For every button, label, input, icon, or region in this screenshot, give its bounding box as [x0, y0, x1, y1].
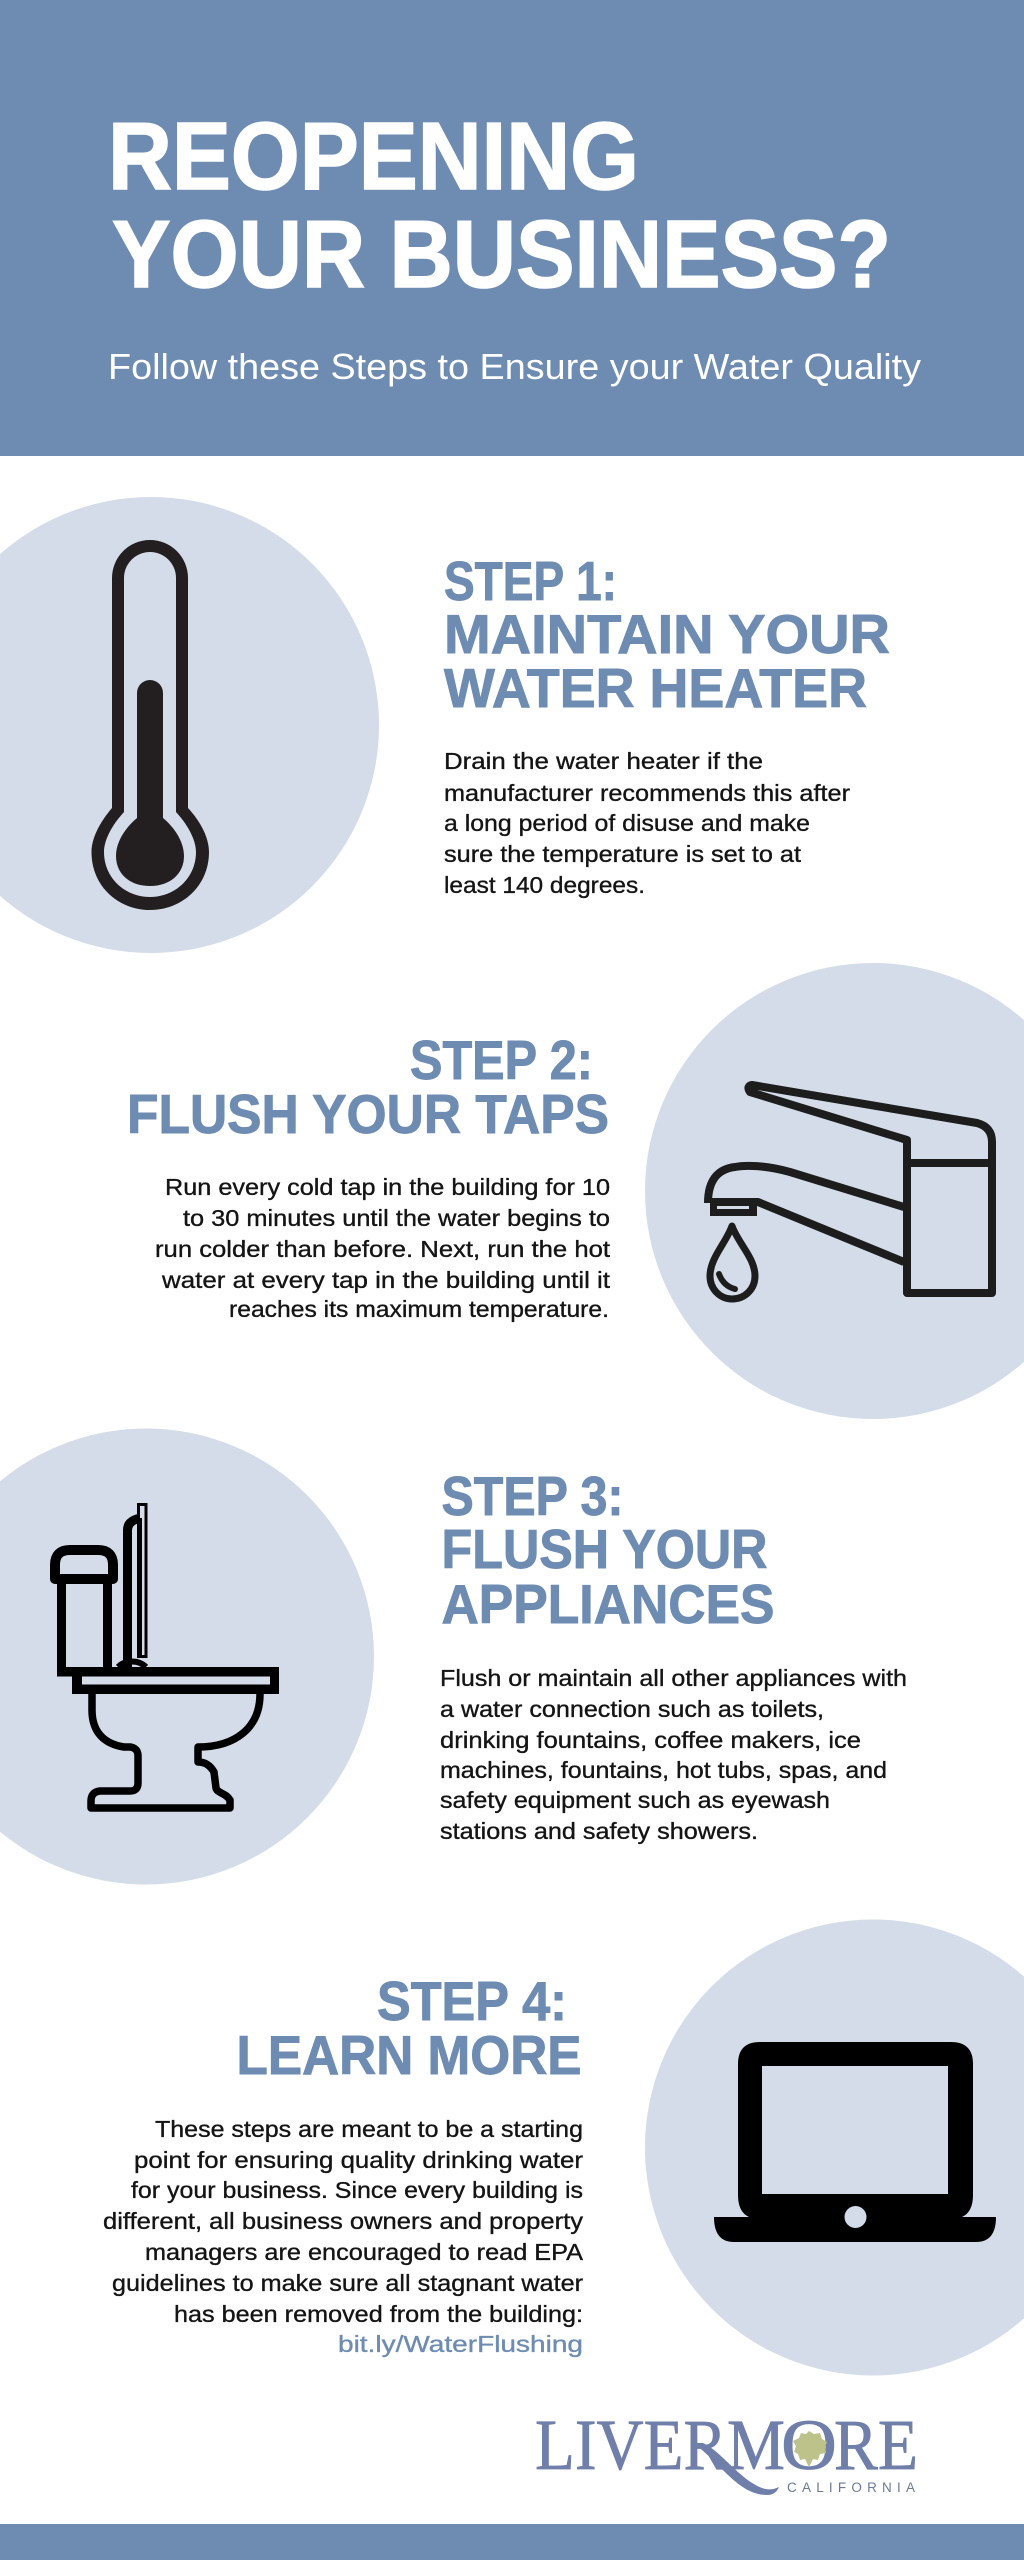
heading: step 2 — [127, 1029, 609, 1145]
circle: step 1 — [0, 497, 379, 953]
text: step 4 body: point for ensuring quality drinking water — [134, 2147, 583, 2173]
text: step 2 body: Run every cold tap in the building for 10 — [165, 1174, 610, 1200]
text: step 4 body: These steps are meant to be a starting — [155, 2116, 583, 2142]
text: step 3 body: a water connection such as toilets, — [440, 1696, 824, 1722]
wordmark: LIVERM — [535, 2405, 785, 2485]
heading: step 3 — [442, 1465, 774, 1635]
panel: step 1 — [0, 497, 890, 953]
tagline: CALIFORNIA — [787, 2480, 915, 2495]
heading: step 1 — [444, 550, 890, 719]
wordmark: RE — [834, 2405, 918, 2485]
heading: step 1: WATER HEATER — [444, 657, 867, 719]
swash — [693, 2443, 779, 2495]
text: step 3 body: stations and safety showers. — [440, 1818, 758, 1844]
text: step 1 body: least 140 degrees. — [444, 872, 645, 898]
footer bar — [0, 2524, 1024, 2560]
text: step 1 body: a long period of disuse and make — [444, 810, 810, 836]
title: YOUR BUSINESS? — [112, 201, 891, 308]
text: step 2 body: water at every tap in the building until it — [161, 1267, 611, 1293]
logo: Livermore California — [535, 2405, 918, 2495]
title — [108, 103, 891, 308]
text: step 4 body: bit.ly/WaterFlushing — [338, 2331, 583, 2357]
text: step 2 body: reaches its maximum temperature. — [229, 1296, 609, 1322]
heading: step 3: FLUSH YOUR — [442, 1518, 768, 1580]
heading: step 3: STEP 3: — [442, 1465, 624, 1527]
circle: step 2 — [645, 963, 1024, 1419]
panel: step 2 — [127, 963, 1024, 1419]
text: step 3 body: machines, fountains, hot tubs, spas, and — [440, 1757, 887, 1783]
icon: grape leaf — [793, 2431, 827, 2467]
text: step 2 body: run colder than before. Next, run the hot — [155, 1236, 611, 1262]
panel: step 3 — [0, 1428, 907, 1884]
heading: step 4: LEARN MORE — [236, 2024, 582, 2086]
icon: toilet — [55, 1504, 279, 1808]
text: step 4 body: for your business. Since every building is — [131, 2177, 583, 2203]
panel: step 4 — [103, 1920, 1024, 2376]
heading: step 1: MAINTAIN YOUR — [444, 603, 890, 665]
text: step 4 body: different, all business owners and property — [103, 2208, 584, 2234]
circle: step 3 — [0, 1428, 374, 1884]
heading: step 2: STEP 2: — [410, 1029, 593, 1091]
text: step 3 body: drinking fountains, coffee makers, ice — [440, 1727, 861, 1753]
text: step 1 body — [444, 748, 850, 898]
icon: thermometer — [92, 540, 209, 910]
subtitle: Follow these Steps to Ensure your Water Quality — [108, 346, 921, 387]
text: step 1 body: Drain the water heater if the — [444, 748, 763, 774]
title: REOPENING — [108, 103, 639, 210]
text: step 1 body: sure the temperature is set to at — [444, 841, 802, 867]
text: step 3 body: safety equipment such as eyewash — [440, 1787, 830, 1813]
heading: step 2: FLUSH YOUR TAPS — [127, 1083, 609, 1145]
circle: step 4 — [645, 1920, 1024, 2376]
text: step 4 body: guidelines to make sure all stagnant water — [112, 2270, 583, 2296]
text: step 3 body: Flush or maintain all other appliances with — [440, 1665, 907, 1691]
text: step 3 body — [440, 1665, 907, 1844]
heading: step 4: STEP 4: — [377, 1970, 567, 2032]
heading: step 4 — [236, 1970, 582, 2086]
header banner — [0, 0, 1024, 456]
text: step 4 body — [103, 2116, 584, 2357]
text: step 2 body: to 30 minutes until the water begins to — [183, 1205, 610, 1231]
text: step 1 body: manufacturer recommends this after — [444, 780, 850, 806]
text: step 4 body: managers are encouraged to read EPA — [145, 2239, 584, 2265]
text: step 4 body: has been removed from the building: — [174, 2301, 583, 2327]
icon: laptop — [714, 2042, 996, 2242]
heading: step 1: STEP 1: — [444, 550, 617, 612]
heading: step 3: APPLIANCES — [442, 1573, 774, 1635]
icon: faucet with drop — [708, 1085, 992, 1299]
text: step 2 body — [155, 1174, 611, 1322]
wordmark: O — [781, 2405, 837, 2485]
